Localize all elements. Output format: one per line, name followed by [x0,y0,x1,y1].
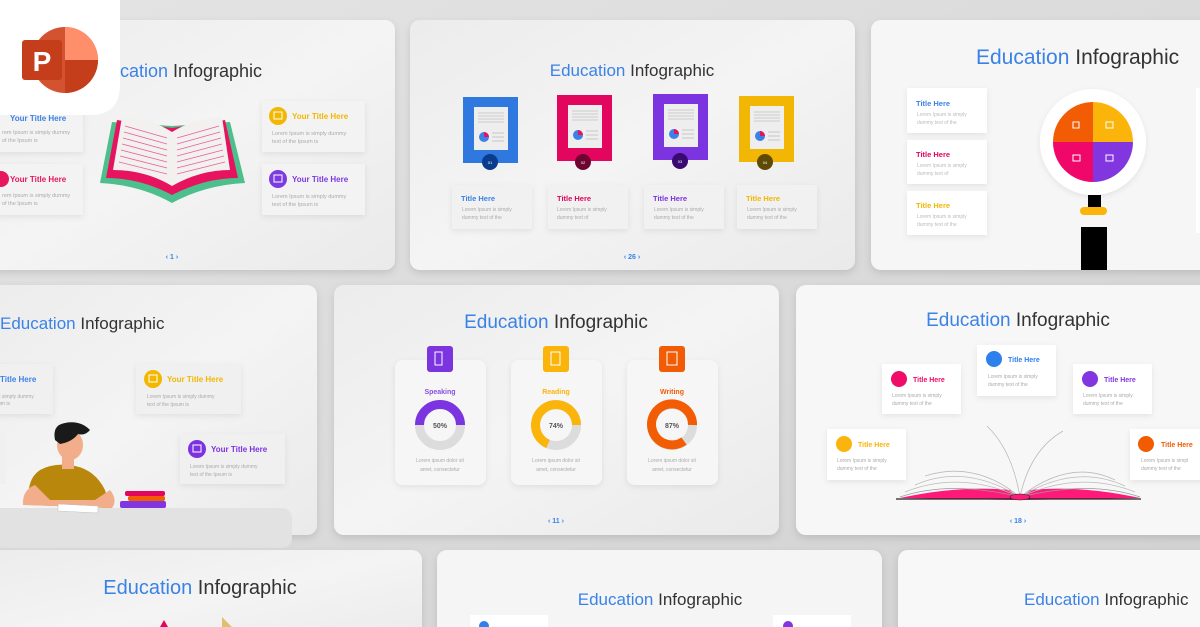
card 1 [452,185,532,229]
card pink: Lorem Ipsum is simply [892,393,942,399]
card: right top: Your Title Here [292,112,349,121]
card 4: dummy text of the [747,215,787,221]
card purple: text of the Ipsum is [190,472,232,478]
slide: student [0,285,317,548]
card 1: dummy text of the [462,215,502,221]
card yellow: Your Title Here [167,375,224,384]
card 2 [907,140,987,184]
page number: ‹ 11 › [548,518,565,525]
logo: PowerPoint badge [0,0,120,115]
card 1: Title Here [461,194,495,203]
card: left top: rem Ipsum is simply dummy [2,130,70,136]
doc 01: 01 [488,160,493,165]
card yellow: text of the Ipsum is [147,402,189,408]
title: Education Infographic [0,314,165,333]
slide: four documents [410,20,855,270]
doc 03: 03 [678,159,683,164]
card yellow [827,429,906,480]
card: right bottom: Lorem Ipsum is simply dummy [272,194,347,200]
card 3: Lorem Ipsum is simply [654,207,704,213]
card: writing: Writing [660,389,684,396]
doc 01 [463,97,518,170]
card 2: Title Here [557,194,591,203]
card 3: Title Here [653,194,687,203]
illustration: student writing [23,422,115,513]
card yellow [136,364,241,414]
card 1: Lorem Ipsum is simply [462,207,512,213]
card purple: Lorem Ipsum is simply [1083,393,1133,399]
card: left top [0,101,83,152]
card 2: dummy text of [557,215,589,221]
card: reading: 74% [549,423,564,430]
card: reading: amet, consectetur [536,467,576,473]
card purple: Lorem Ipsum is simply dummy [190,464,258,470]
card blue: Lorem Ipsum is simply [988,374,1038,380]
card 3: Lorem Ipsum is simply [917,214,967,220]
doc 04 [739,96,794,170]
card 4: Lorem Ipsum is simply [747,207,797,213]
icon: magnifier pie [1040,89,1146,270]
card: right bottom: Your Title Here [292,175,349,184]
card pink: Title Here [913,377,945,384]
title: Education Infographic [1024,590,1189,609]
slide: magnifier [871,20,1200,270]
card yellow: Lorem Ipsum is simply [837,458,887,464]
card 3: dummy text of the [654,215,694,221]
card: right top [262,101,365,152]
card 4: Title Here [746,194,780,203]
card: right bottom [262,164,365,215]
card: writing: 87% [665,423,680,430]
slide: open book with five titles [796,285,1200,535]
card yellow: Lorem Ipsum is simply dummy [147,394,215,400]
card 3: Title Here [916,201,950,210]
card purple: dummy text of the [1083,401,1123,407]
desk [0,508,292,548]
title: Education Infographic [976,46,1179,69]
page number: ‹ 1 › [166,254,179,261]
slide: speaking reading writing [334,285,779,535]
card 1: dummy text of the [917,120,957,126]
title: Education Infographic [578,590,743,609]
card yellow: Title Here [858,442,890,449]
card pink: dummy text of the [892,401,932,407]
card: left top: of the Ipsum is [2,138,38,144]
card blue: Title Here [1008,357,1040,364]
icon: open book [100,117,245,203]
card purple [180,434,285,484]
card purple [1073,364,1152,414]
card blue: dummy text of the [988,382,1028,388]
card orange: dummy text of the [1141,466,1181,472]
card 3 [644,185,724,229]
card: speaking [395,346,486,485]
card yellow: dummy text of the [837,466,877,472]
doc 04: 04 [763,160,768,165]
card: speaking: Speaking [424,389,456,396]
card: writing: amet, consectetur [652,467,692,473]
card: speaking: 50% [433,423,448,430]
card orange: Title Here [1161,442,1193,449]
card 2: Lorem Ipsum is simply [917,163,967,169]
card: left bottom: of the Ipsum is [2,201,38,207]
card: left top: Your Title Here [10,114,67,123]
title: Education Infographic [103,577,297,599]
card 4 [737,185,817,229]
card: speaking: amet, consectetur [420,467,460,473]
card orange: Lorem Ipsum is simpl [1141,458,1188,464]
card: right top: Lorem Ipsum is simply dummy [272,131,347,137]
card: speaking: Lorem ipsum dolor sit [416,458,465,464]
card: left bottom: rem Ipsum is simply dummy [2,193,70,199]
doc 02 [557,95,612,170]
title: Education Infographic [464,312,648,333]
title: Education Infographic [88,61,262,81]
doc 02: 02 [581,160,586,165]
card: left bottom: Your Title Here [10,175,67,184]
card: writing [627,346,718,485]
doc 03 [653,94,708,169]
card purple: Title Here [1104,377,1136,384]
card: reading: Lorem ipsum dolor sit [532,458,581,464]
card: writing: Lorem ipsum dolor sit [648,458,697,464]
illustration: open book [896,426,1141,500]
card 3: dummy text of the [917,222,957,228]
card 1: Title Here [916,99,950,108]
card 2: dummy text of [917,171,949,177]
icon: book stack [120,491,166,508]
card: right top: text of the Ipsum is [272,139,318,145]
card 1: Lorem Ipsum is simply [917,112,967,118]
card left top [0,364,53,414]
card pink [882,364,961,414]
card: reading [511,346,602,485]
card 2: Lorem Ipsum is simply [557,207,607,213]
card right (partial) [1196,88,1200,233]
card 2 [548,185,628,229]
slide: book with four titles [0,20,395,270]
card orange [1130,429,1200,480]
page number: ‹ 18 › [1010,518,1027,525]
card 2: Title Here [916,150,950,159]
card purple: Your Title Here [211,445,268,454]
card left bottom [0,434,6,484]
logo: PowerPoint badge: P [33,46,51,77]
card 3 [907,191,987,235]
card 1 [907,88,987,133]
slide: bottom middle [437,550,882,627]
card: reading: Reading [542,389,570,396]
title: Education Infographic [550,61,715,80]
slide: bottom right [898,550,1200,627]
title: Education Infographic [926,310,1110,331]
card: left bottom [0,164,83,215]
card left top: Title Here [0,375,37,384]
slide: bottom left [0,550,422,627]
card: right bottom: text of the Ipsum is [272,202,318,208]
card blue [977,345,1056,396]
page number: ‹ 26 › [624,254,641,261]
